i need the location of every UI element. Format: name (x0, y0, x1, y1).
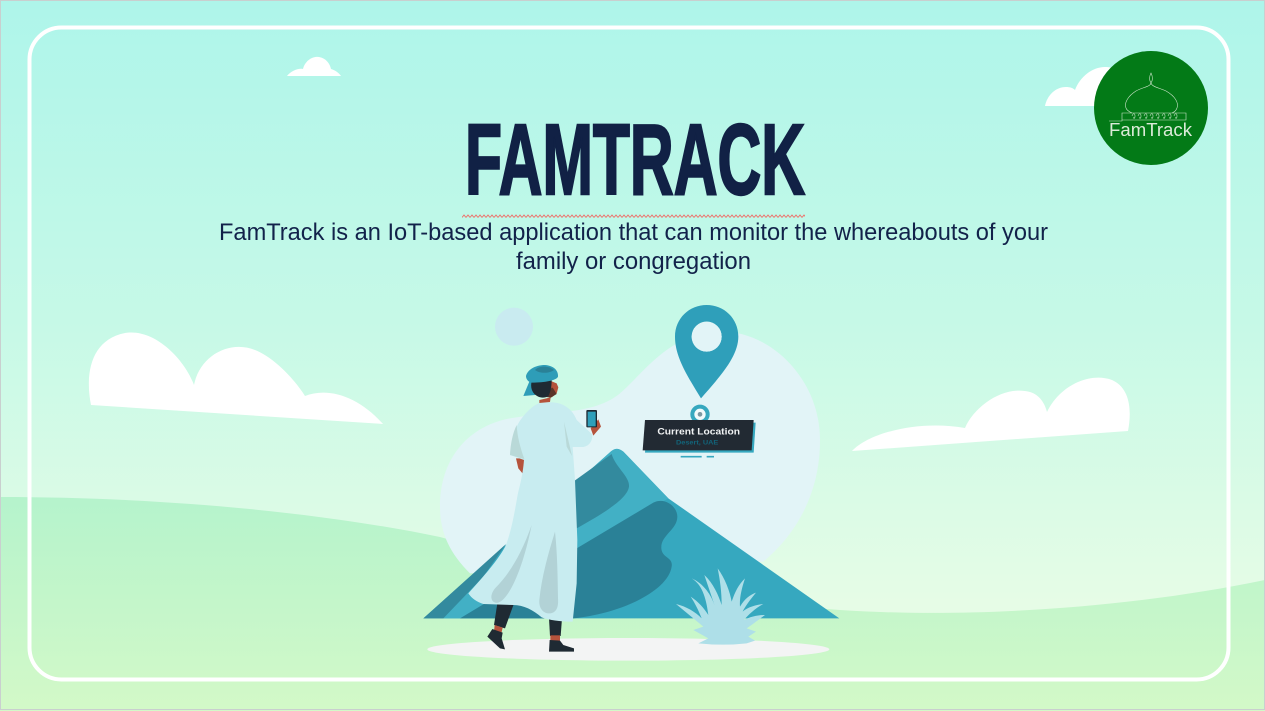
location dot (690, 405, 710, 424)
phone hand (591, 419, 601, 436)
turban (526, 365, 558, 383)
card dashes (681, 454, 714, 459)
cloud: big left (89, 332, 383, 424)
hair (531, 379, 552, 398)
dune lower shadow (460, 501, 677, 618)
dune left shade (423, 544, 506, 618)
front leg (549, 618, 562, 636)
sun circle (495, 308, 533, 346)
robe fold left (491, 525, 532, 603)
card body (643, 420, 754, 450)
logo wordmark: FamTrack (1109, 120, 1193, 140)
illustration (423, 305, 839, 661)
subtitle (219, 219, 1048, 275)
dune upper shadow (573, 454, 629, 528)
cloud: top right (1045, 67, 1130, 106)
subtitle: FamTrack is an IoT-based application that can monitor the whereabouts of your (219, 219, 1048, 246)
card place: Desert, UAE (676, 440, 718, 447)
beard (544, 387, 557, 398)
back leg (494, 603, 514, 628)
backdrop blob (440, 331, 820, 573)
location pin (675, 305, 738, 398)
title: FAMTRACK (465, 104, 805, 216)
cloud: small top (287, 57, 341, 76)
spellcheck squiggle (462, 214, 805, 219)
pin hole (692, 322, 722, 352)
dune light ridge (440, 449, 668, 618)
left sleeve shade (510, 425, 524, 459)
person (468, 365, 601, 652)
arm crease (564, 422, 572, 456)
logo dome line art (1109, 73, 1186, 121)
card heading: Current Location (657, 426, 740, 436)
dune (423, 449, 839, 618)
turban tail (523, 380, 535, 396)
logo badge (1094, 51, 1208, 165)
turban top (535, 367, 554, 373)
cloud: big right (852, 378, 1130, 451)
green hills (0, 497, 1265, 711)
robe (468, 402, 592, 622)
location card (643, 420, 756, 453)
front shoe (549, 640, 574, 652)
ground ellipse (427, 638, 829, 661)
robe fold right (539, 532, 558, 613)
card shadow (645, 423, 756, 453)
hand on hip (516, 458, 527, 474)
bush (676, 568, 765, 645)
back shoe (487, 629, 505, 649)
subtitle: family or congregation (516, 248, 751, 275)
phone (586, 410, 597, 427)
neck (539, 397, 551, 403)
face (545, 380, 558, 397)
